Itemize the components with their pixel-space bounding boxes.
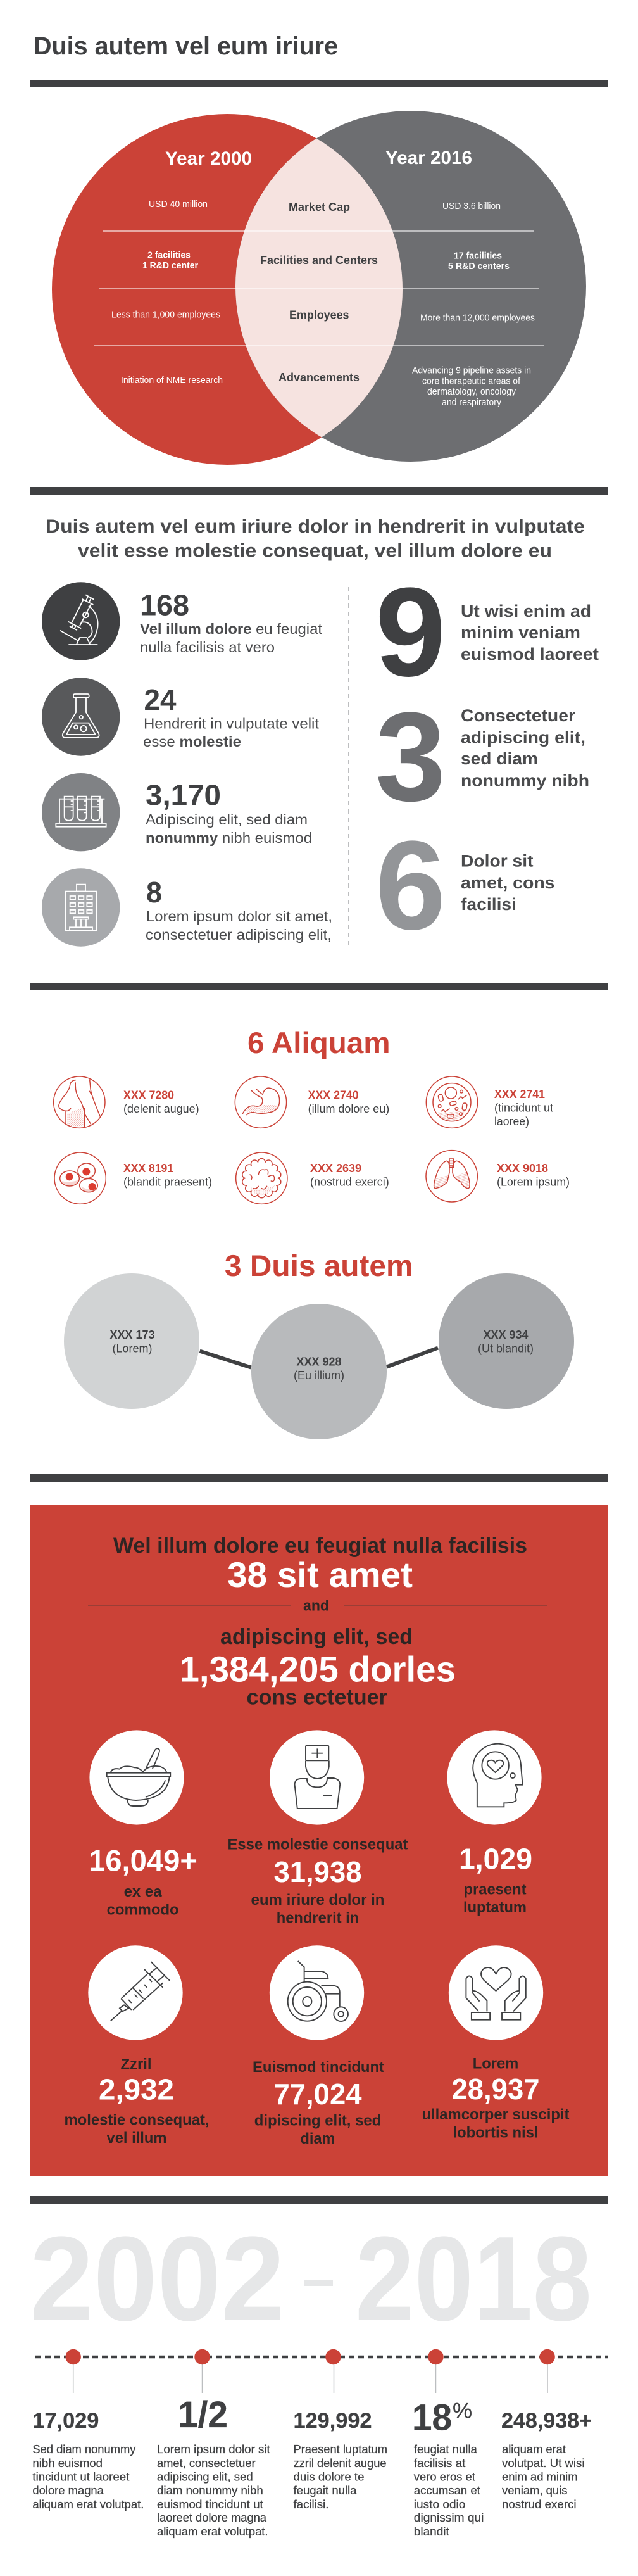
description: Adipiscing elit, sed diam: [146, 811, 308, 828]
timeline item: 248,938+: veniam, quis: [502, 2484, 567, 2497]
big number: 9: 9: [375, 562, 446, 703]
description: [146, 908, 332, 943]
year 2000 column text: 1 R&D center: [142, 260, 198, 271]
circle: year 2000: [52, 114, 403, 465]
description: [140, 621, 323, 655]
heading: 6 Aliquam: 6 Aliquam: [247, 1026, 391, 1059]
item: XXX 2741: [426, 1076, 553, 1128]
sublabel: (nostrud exerci): [310, 1175, 389, 1188]
connector lines: [200, 1348, 438, 1368]
stat: 77,024: Euismod tincidunt: [253, 2059, 384, 2076]
sublabel: (tincidunt ut: [494, 1102, 553, 1114]
timeline item: 129,992: [294, 2409, 387, 2511]
section bar: [30, 2196, 608, 2204]
timeline item: 129,992: 129,992: [294, 2409, 372, 2433]
label: XXX 2740: [308, 1089, 359, 1102]
overlap labels: Advancements: [278, 371, 360, 384]
timeline item: 17,029: 17,029: [32, 2409, 99, 2433]
timeline item: 248,938+: [501, 2409, 592, 2511]
timeline item: 18%: %: [453, 2399, 472, 2423]
section bar: [30, 983, 608, 990]
big number: 3: [375, 686, 589, 828]
number: 8: [146, 876, 162, 909]
description: nulla facilisis at vero: [140, 639, 275, 655]
timeline item: 1/2: [157, 2394, 270, 2538]
timeline item: 17,029: tincidunt ut laoreet: [32, 2471, 129, 2484]
divider rules: [88, 1605, 547, 1606]
sublabel: (Lorem ipsum): [497, 1175, 570, 1188]
stat: 2,932: vel illum: [106, 2130, 167, 2147]
icon: head with heart: [447, 1730, 542, 1825]
caption: adipiscing elit,: [461, 728, 585, 747]
timeline item: 129,992: facilisi.: [294, 2498, 329, 2511]
section bar: [30, 487, 608, 495]
title: Duis autem vel eum iriure: [34, 32, 338, 60]
stat: 31,938: 31,938: [273, 1855, 362, 1888]
stat: 1,029: luptatum: [463, 1899, 527, 1916]
stat: 3,170: [42, 773, 312, 851]
icon: flask: [42, 678, 120, 756]
icon: stomach: [235, 1076, 287, 1128]
sublabel: [494, 1102, 553, 1128]
number: 168: [140, 589, 189, 622]
stat: 28,937: lobortis nisl: [453, 2125, 538, 2142]
overlap labels: Facilities and Centers: [260, 254, 378, 267]
icon: syringe: [88, 1945, 183, 2040]
year 2000 heading: Year 2000: [165, 148, 252, 169]
stat: 8: [42, 868, 332, 947]
icon: cell dish: [426, 1076, 478, 1128]
icon: cells: [54, 1152, 106, 1204]
timeline item: 18%: [412, 2397, 484, 2538]
stats heading: velit esse molestie consequat, vel illum dolore eu: [78, 541, 552, 561]
icon: tumour: [236, 1152, 287, 1204]
bubble: XXX 934: (Ut blandit): [478, 1342, 534, 1355]
caption: Dolor sit: [461, 851, 533, 870]
timeline item: 17,029: aliquam erat volutpat.: [32, 2498, 144, 2511]
year 2016 column text: [412, 201, 535, 408]
stat: 168: [42, 582, 323, 660]
bubble: XXX 173: XXX 173: [110, 1329, 154, 1341]
stat: 28,937: 28,937: [452, 2073, 539, 2106]
bubble: XXX 173: (Lorem): [112, 1342, 153, 1355]
stat: 2,932: [65, 1945, 209, 2147]
timeline item: 17,029: Sed diam nonummy: [32, 2443, 135, 2456]
stat: 28,937: Lorem: [473, 2055, 518, 2073]
description: nonummy nibh euismod: [146, 830, 312, 846]
stat: 2,932: 2,932: [99, 2073, 174, 2106]
description: Lorem ipsum dolor sit amet,: [146, 908, 332, 925]
year 2016 column text: and respiratory: [442, 397, 501, 408]
caption: Consectetuer: [461, 706, 576, 725]
timeline item: 248,938+: aliquam erat: [502, 2443, 566, 2456]
caption: Ut wisi enim ad: [461, 602, 591, 621]
timeline item: 248,938+: volutpat. Ut wisi: [502, 2457, 585, 2470]
timeline item: 1/2: diam nonummy nibh: [157, 2484, 263, 2497]
stats heading: Duis autem vel eum iriure dolor in hendrerit in vulputate: [46, 516, 585, 537]
timeline item: 17,029: dolore magna: [32, 2484, 104, 2497]
description: Vel illum dolore eu feugiat: [140, 621, 323, 637]
icon: breast: [54, 1076, 105, 1128]
caption: amet, cons: [461, 873, 554, 892]
stat: 1,029: 1,029: [459, 1843, 532, 1876]
panel heading: 1,384,205 dorles: [180, 1650, 456, 1690]
caption: nonummy nibh: [461, 771, 589, 790]
stat: 16,049+: ex ea: [124, 1883, 162, 1900]
label: XXX 8191: [123, 1162, 173, 1175]
label: XXX 9018: [497, 1162, 548, 1175]
stat: 28,937: [422, 1945, 570, 2142]
timeline item: 17,029: [32, 2409, 144, 2511]
label: XXX 2639: [310, 1162, 361, 1175]
number: 3,170: [146, 779, 221, 812]
year 2016 column text: USD 3.6 billion: [442, 201, 501, 212]
panel heading: Wel illum dolore eu feugiat nulla facilisis: [113, 1534, 527, 1558]
stat: 77,024: [253, 1945, 384, 2147]
timeline year range: 2018: [355, 2212, 592, 2346]
timeline item: 1/2: 1/2: [178, 2394, 228, 2435]
venn row dividers: [94, 231, 544, 346]
section bar: [30, 1474, 608, 1482]
stat: 16,049+: [89, 1730, 197, 1919]
big number: 6: [375, 815, 554, 956]
panel heading: 38 sit amet: [227, 1555, 413, 1594]
description: [146, 811, 312, 846]
year 2016 column text: More than 12,000 employees: [420, 313, 535, 323]
timeline item: 1/2: amet, consectetuer: [157, 2457, 256, 2470]
caption: euismod laoreet: [461, 645, 599, 664]
number: 24: [144, 683, 177, 716]
panel heading: and: [303, 1598, 329, 1615]
item: XXX 2639: [236, 1152, 389, 1204]
caption: [461, 602, 599, 664]
timeline item: 129,992: duis dolore te: [294, 2471, 365, 2484]
stat: 1,029: praesent: [463, 1881, 527, 1898]
stats heading: [46, 516, 585, 561]
sublabel: laoree): [494, 1115, 529, 1128]
timeline item: 1/2: Lorem ipsum dolor sit: [157, 2443, 270, 2456]
timeline item: 18%: accumsan et: [414, 2484, 480, 2497]
timeline item: 1/2: adipiscing elit, sed: [157, 2471, 253, 2484]
bubble: XXX 928: XXX 928: [296, 1355, 342, 1368]
timeline pins: [66, 2349, 555, 2393]
icon: building: [42, 868, 120, 947]
bubble: XXX 928: (Eu illium): [294, 1369, 344, 1382]
stat: 2,932: Zzril: [120, 2056, 152, 2073]
caption: minim veniam: [461, 623, 580, 642]
timeline item: 1/2: aliquam erat volutpat.: [157, 2525, 268, 2538]
year 2016 heading: Year 2016: [385, 148, 472, 168]
year 2016 column text: Advancing 9 pipeline assets in: [412, 365, 531, 376]
overlap labels: [260, 201, 378, 384]
year 2000 column text: [111, 199, 223, 386]
sublabel: (blandit praesent): [123, 1175, 212, 1188]
icon: hands and heart: [449, 1945, 543, 2040]
caption: [461, 706, 589, 790]
timeline item: 18%: vero eros et: [414, 2471, 475, 2484]
year 2000 column text: 2 facilities: [147, 249, 191, 261]
caption: [461, 851, 554, 914]
big number: 6: 6: [375, 815, 446, 956]
year 2000 column text: USD 40 million: [149, 199, 208, 210]
stat: 31,938: Esse molestie consequat: [228, 1836, 408, 1853]
stat: 16,049+: 16,049+: [89, 1844, 197, 1878]
label: XXX 7280: [123, 1089, 174, 1102]
venn overlap: [235, 138, 403, 437]
timeline item: 248,938+: enim ad minim: [502, 2471, 578, 2484]
timeline item: 1/2: euismod tincidunt ut: [157, 2498, 263, 2511]
panel heading: adipiscing elit, sed: [220, 1625, 413, 1649]
timeline item: 18%: dignissim qui: [414, 2511, 484, 2524]
bubble: XXX 173: [64, 1273, 199, 1409]
timeline item: 129,992: zzril delenit augue: [294, 2457, 386, 2470]
description: Hendrerit in vulputate velit: [144, 716, 320, 732]
caption: facilisi: [461, 895, 516, 914]
stat: 77,024: dipiscing elit, sed: [254, 2112, 381, 2130]
description: esse molestie: [143, 733, 241, 750]
item: XXX 2740: [235, 1076, 389, 1128]
stat: 31,938: [228, 1730, 408, 1927]
stat: 2,932: molestie consequat,: [65, 2112, 209, 2129]
year 2000 column text: Initiation of NME research: [121, 375, 223, 386]
stat: 77,024: diam: [300, 2130, 335, 2147]
icon: doctor: [270, 1730, 364, 1825]
panel heading: cons ectetuer: [247, 1685, 387, 1709]
timeline year range: 2002: [30, 2212, 285, 2346]
overlap labels: Employees: [289, 309, 349, 322]
timeline item: 129,992: Praesent luptatum: [294, 2443, 387, 2456]
column divider: [348, 587, 349, 947]
timeline item: 18%: iusto odio: [414, 2498, 465, 2511]
overlap labels: Market Cap: [289, 201, 350, 213]
icon: test tubes: [42, 773, 120, 851]
icon: lungs: [426, 1151, 477, 1202]
stat: 1,029: [447, 1730, 542, 1916]
description: consectetuer adipiscing elit,: [146, 926, 332, 943]
timeline item: 18%: facilisis at: [414, 2457, 465, 2470]
year 2016 column text: 17 facilities: [454, 251, 502, 261]
icon: wheelchair: [270, 1945, 364, 2040]
icon: microscope: [42, 582, 120, 660]
bubble: XXX 934: XXX 934: [484, 1329, 528, 1341]
stat: 31,938: hendrerit in: [277, 1910, 359, 1927]
description: [143, 716, 320, 750]
timeline item: 18%: 18: [412, 2397, 452, 2438]
circle: year 2016: [235, 111, 586, 462]
timeline item: 1/2: laoreet dolore magna: [157, 2511, 267, 2524]
item: XXX 7280: [54, 1076, 199, 1128]
stat: 77,024: 77,024: [273, 2078, 362, 2111]
timeline item: 18%: blandit: [414, 2525, 449, 2538]
bubble: XXX 928: [251, 1304, 387, 1439]
bubble: XXX 934: [439, 1273, 574, 1409]
icon: bowl: [89, 1730, 184, 1825]
year 2000 column text: Less than 1,000 employees: [111, 309, 220, 320]
year 2016 column text: 5 R&D centers: [448, 261, 510, 272]
label: XXX 2741: [494, 1088, 545, 1101]
panel heading: [113, 1534, 527, 1709]
stat: 16,049+: commodo: [107, 1901, 179, 1919]
stat: 31,938: eum iriure dolor in: [251, 1891, 385, 1909]
red panel: [30, 1505, 608, 2176]
heading: 3 Duis autem: 3 Duis autem: [225, 1249, 413, 1282]
sublabel: (delenit augue): [123, 1102, 199, 1115]
header bar: [30, 80, 608, 87]
item: XXX 8191: [54, 1152, 212, 1204]
timeline item: 248,938+: nostrud exerci: [502, 2498, 577, 2511]
year 2016 column text: dermatology, oncology: [427, 386, 516, 397]
venn diagram panel: [52, 111, 586, 465]
timeline year range: [30, 2212, 592, 2346]
year 2016 column text: core therapeutic areas of: [422, 376, 521, 386]
sublabel: (illum dolore eu): [308, 1102, 389, 1115]
big number: 3: 3: [375, 686, 446, 828]
timeline item: 17,029: nibh euismod: [32, 2457, 103, 2470]
stat: 28,937: ullamcorper suscipit: [422, 2106, 570, 2123]
timeline axis: [35, 2356, 608, 2358]
caption: sed diam: [461, 749, 538, 768]
big number: 9: [375, 562, 599, 703]
stat: 24: [42, 678, 320, 756]
timeline item: 248,938+: 248,938+: [501, 2409, 592, 2433]
timeline item: 129,992: feugait nulla: [294, 2484, 358, 2497]
item: XXX 9018: [426, 1151, 570, 1202]
timeline item: 18%: feugiat nulla: [414, 2443, 478, 2456]
